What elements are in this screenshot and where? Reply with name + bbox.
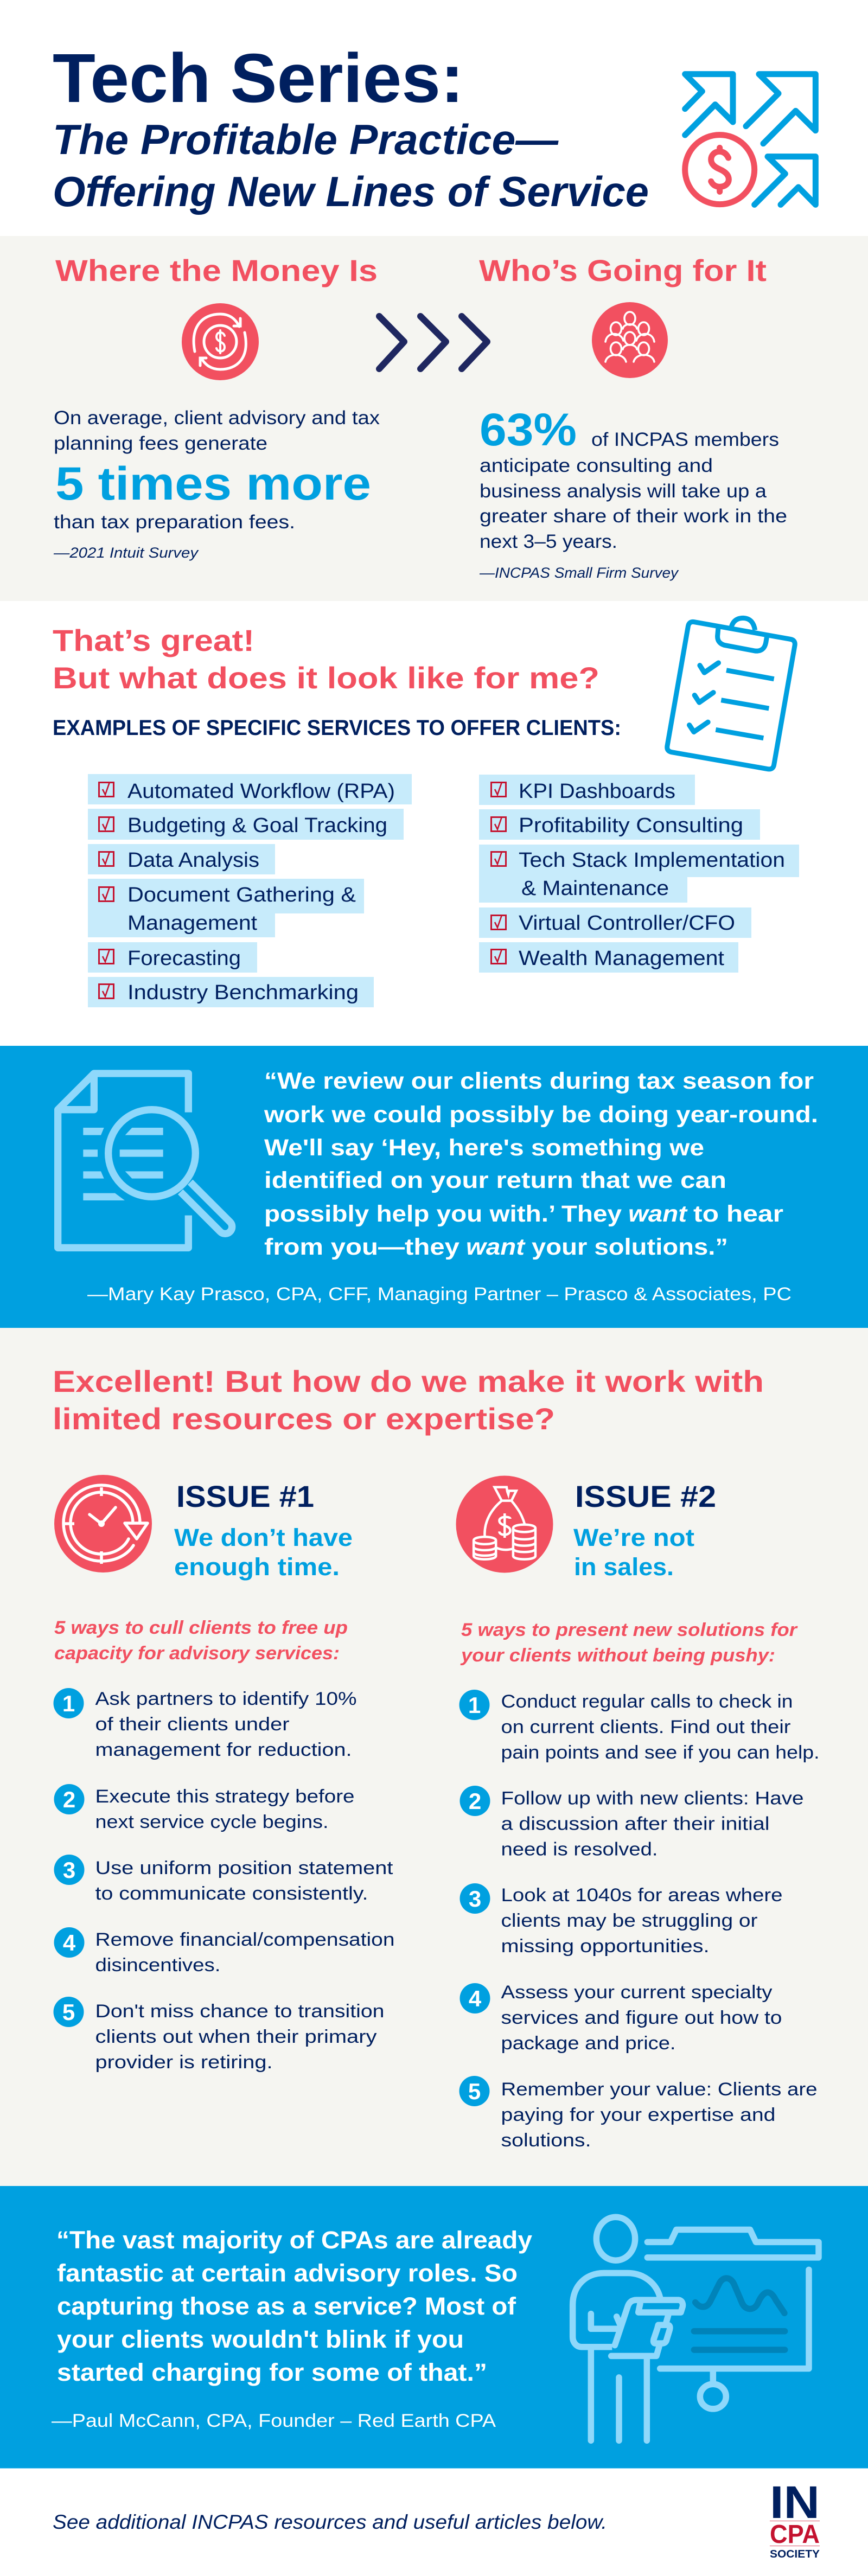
list: services left column: Industry Benchmarking bbox=[127, 981, 359, 1004]
quote text: “We review our clients during tax season for bbox=[264, 1068, 814, 1094]
heading: issue 1 bbox=[174, 1479, 353, 1581]
logo: IN CPA Society: CPA bbox=[770, 2520, 820, 2549]
heading: that's great bbox=[53, 623, 599, 695]
stat: 5 times more: 5 times more bbox=[55, 458, 371, 510]
text: INCPAS members: greater share of their work in the bbox=[480, 506, 787, 527]
subheading: present solutions: 5 ways to present new solutions for bbox=[461, 1620, 798, 1640]
list: services right column: & Maintenance bbox=[521, 877, 669, 900]
list: ways to cull clients: management for reduction. bbox=[95, 1740, 352, 1760]
quote text: capturing those as a service? Most of bbox=[57, 2292, 516, 2320]
heading: where the money is: Where the Money Is bbox=[55, 253, 378, 287]
list: ways to cull clients bbox=[53, 1688, 395, 2073]
list: services right column bbox=[479, 775, 799, 973]
heading: issue 2: We’re not bbox=[573, 1524, 694, 1551]
subtitle bbox=[53, 116, 649, 215]
arrow: three chevrons bbox=[379, 316, 487, 369]
quote text: want bbox=[628, 1201, 688, 1227]
list: ways to cull clients: 3 bbox=[63, 1857, 75, 1883]
list: ways to cull clients: Don't miss chance to transition bbox=[95, 2001, 384, 2022]
icon: circular money flow bbox=[182, 303, 259, 380]
list: services left column: Automated Workflow (RPA) bbox=[127, 780, 395, 803]
icon: clock with arrow bbox=[54, 1475, 152, 1573]
list: ways to cull clients: Remove financial/compensation bbox=[95, 1929, 395, 1950]
quote attribution: —Mary Kay Prasco, CPA, CFF, Managing Partner – Prasco & Associates, PC bbox=[87, 1284, 792, 1305]
icon: presenter with chart board bbox=[573, 2217, 819, 2440]
subheading: cull clients bbox=[54, 1618, 348, 1664]
list: ways to cull clients: to communicate consistently. bbox=[95, 1883, 368, 1904]
quote text: to hear bbox=[693, 1201, 783, 1227]
text: INCPAS members: business analysis will take up a bbox=[480, 481, 767, 502]
list: services right column: Wealth Management bbox=[519, 947, 724, 970]
quote text: work we could possibly be doing year-round. bbox=[264, 1102, 818, 1128]
heading: excellent: Excellent! But how do we make it work with bbox=[53, 1364, 764, 1398]
list: ways to present solutions: Remember your value: Clients are bbox=[501, 2079, 817, 2100]
list: services left column bbox=[88, 774, 412, 1007]
logo: IN CPA Society: SOCIETY bbox=[770, 2548, 820, 2560]
list: ways to present solutions: pain points and see if you can help. bbox=[501, 1742, 819, 1763]
text: advisory fees: —2021 Intuit Survey bbox=[53, 545, 199, 561]
list: ways to present solutions: package and price. bbox=[501, 2033, 676, 2054]
heading: issue 2: ISSUE #2 bbox=[575, 1479, 716, 1513]
list: ways to present solutions: 1 bbox=[468, 1692, 481, 1718]
list: ways to present solutions: Look at 1040s for areas where bbox=[501, 1885, 782, 1906]
list: ways to present solutions: solutions. bbox=[501, 2130, 591, 2151]
text: INCPAS members: anticipate consulting and bbox=[480, 455, 713, 476]
list: ways to present solutions: 2 bbox=[469, 1788, 481, 1814]
list: ways to cull clients: 1 bbox=[62, 1691, 75, 1716]
list: ways to present solutions: 4 bbox=[469, 1986, 482, 2011]
quote text: your solutions.” bbox=[532, 1234, 728, 1260]
list: services left column: Budgeting & Goal Tracking bbox=[127, 814, 387, 837]
quote text: “The vast majority of CPAs are already bbox=[56, 2226, 532, 2254]
text: INCPAS members: —INCPAS Small Firm Survey bbox=[479, 565, 679, 581]
icon: group of people bbox=[592, 302, 668, 378]
list: ways to cull clients: next service cycle begins. bbox=[95, 1812, 329, 1832]
text: advisory fees: On average, client advisory and tax bbox=[54, 407, 380, 429]
list: ways to cull clients: of their clients under bbox=[95, 1714, 290, 1735]
subheading: present solutions bbox=[460, 1620, 798, 1666]
title: Tech Series: bbox=[53, 40, 464, 117]
list: ways to cull clients: Use uniform position statement bbox=[95, 1858, 393, 1878]
list: ways to present solutions: missing opportunities. bbox=[501, 1936, 710, 1957]
quote attribution: —Paul McCann, CPA, Founder – Red Earth CPA bbox=[52, 2411, 496, 2431]
quote text: your clients wouldn't blink if you bbox=[57, 2325, 464, 2353]
subtitle: Offering New Lines of Service bbox=[53, 168, 649, 215]
list: services right column: Profitability Consulting bbox=[519, 814, 743, 837]
text: INCPAS members: of INCPAS members bbox=[591, 429, 779, 450]
list: services left column: Data Analysis bbox=[127, 849, 259, 872]
text: advisory fees bbox=[53, 407, 380, 561]
subtitle: The Profitable Practice— bbox=[53, 116, 559, 163]
text: advisory fees: planning fees generate bbox=[54, 433, 267, 454]
heading: that's great: That’s great! bbox=[53, 623, 254, 657]
list: services left column: Document Gathering & bbox=[127, 884, 356, 906]
list: ways to cull clients: 5 bbox=[62, 1999, 75, 2025]
heading: issue 2 bbox=[573, 1479, 716, 1581]
list: services right column: KPI Dashboards bbox=[519, 780, 675, 803]
icon: clipboard checklist bbox=[667, 618, 795, 769]
list: ways to present solutions: paying for your expertise and bbox=[501, 2105, 776, 2125]
list: ways to present solutions: on current clients. Find out their bbox=[501, 1717, 791, 1737]
heading: issue 2: in sales. bbox=[574, 1553, 674, 1581]
logo: IN CPA Society: IN bbox=[770, 2477, 820, 2528]
panel: footer bbox=[0, 2468, 868, 2576]
heading: excellent bbox=[53, 1364, 764, 1436]
quote text: identified on your return that we can bbox=[264, 1167, 726, 1193]
list: ways to present solutions: a discussion after their initial bbox=[501, 1814, 769, 1834]
quote text: want bbox=[466, 1234, 526, 1260]
panel: limited resources issues bbox=[0, 1328, 868, 2186]
list: ways to present solutions: services and figure out how to bbox=[501, 2008, 782, 2028]
icon: arrows and dollar coin bbox=[685, 74, 815, 204]
quote text: We'll say ‘Hey, here's something we bbox=[264, 1135, 704, 1161]
list: ways to cull clients: disincentives. bbox=[95, 1955, 220, 1976]
panel: Paul McCann quote bbox=[0, 2186, 868, 2468]
list: ways to present solutions: 3 bbox=[469, 1886, 481, 1912]
quote text bbox=[264, 1068, 818, 1260]
text: advisory fees: than tax preparation fees. bbox=[54, 512, 295, 533]
icon: document with magnifying glass bbox=[58, 1073, 232, 1248]
list: services right column: Virtual Controller/CFO bbox=[519, 912, 735, 935]
list: services left column: Forecasting bbox=[127, 947, 241, 970]
panel: money and who is going for it bbox=[0, 236, 868, 601]
logo: IN CPA Society bbox=[770, 2477, 820, 2560]
panel: header bbox=[0, 0, 868, 236]
list: ways to cull clients: Execute this strategy before bbox=[95, 1786, 355, 1807]
heading: issue 1: We don’t have bbox=[174, 1524, 353, 1551]
list: ways to present solutions: clients may be struggling or bbox=[501, 1910, 757, 1931]
quote text: started charging for some of that.” bbox=[57, 2358, 487, 2386]
panel: Mary Kay Prasco quote bbox=[0, 1046, 868, 1328]
list: ways to present solutions: 5 bbox=[468, 2079, 481, 2104]
footer note: See additional INCPAS resources and useful articles below. bbox=[53, 2511, 607, 2533]
heading: excellent: limited resources or expertise? bbox=[53, 1402, 555, 1436]
heading: who is going for it: Who’s Going for It bbox=[479, 253, 767, 287]
list: services left column: Management bbox=[127, 912, 257, 935]
icon: money bag and coins bbox=[456, 1475, 553, 1573]
quote text: fantastic at certain advisory roles. So bbox=[57, 2259, 518, 2287]
subheading: examples: EXAMPLES OF SPECIFIC SERVICES TO OFFER CLIENTS: bbox=[53, 716, 621, 740]
list: ways to cull clients: provider is retiring. bbox=[95, 2052, 272, 2073]
quote text: possibly help you with.’ They bbox=[264, 1201, 622, 1227]
heading: issue 1: ISSUE #1 bbox=[176, 1479, 314, 1513]
quote text bbox=[56, 2226, 532, 2386]
text: INCPAS members: next 3–5 years. bbox=[480, 531, 617, 552]
list: ways to cull clients: clients out when their primary bbox=[95, 2027, 376, 2047]
list: services right column: Tech Stack Implementation bbox=[519, 849, 785, 872]
list: ways to cull clients: 4 bbox=[63, 1930, 76, 1955]
list: ways to cull clients: 2 bbox=[63, 1787, 75, 1812]
subheading: cull clients: capacity for advisory services: bbox=[54, 1643, 340, 1664]
list: ways to present solutions: need is resolved. bbox=[501, 1839, 658, 1859]
heading: issue 1: enough time. bbox=[174, 1553, 340, 1581]
list: ways to present solutions bbox=[459, 1690, 819, 2151]
list: ways to present solutions: Assess your current specialty bbox=[501, 1982, 773, 2003]
list: ways to cull clients: Ask partners to identify 10% bbox=[95, 1689, 357, 1709]
list: ways to present solutions: Conduct regular calls to check in bbox=[501, 1691, 793, 1712]
list: ways to present solutions: Follow up with new clients: Have bbox=[501, 1788, 804, 1808]
text: INCPAS members bbox=[479, 404, 787, 581]
stat: 63%: 63% bbox=[480, 404, 577, 455]
panel: example services bbox=[0, 601, 868, 1046]
heading: that's great: But what does it look like for me? bbox=[53, 661, 599, 695]
quote text: from you—they bbox=[264, 1234, 459, 1260]
subheading: cull clients: 5 ways to cull clients to free up bbox=[54, 1618, 348, 1638]
subheading: present solutions: your clients without being pushy: bbox=[460, 1645, 775, 1666]
